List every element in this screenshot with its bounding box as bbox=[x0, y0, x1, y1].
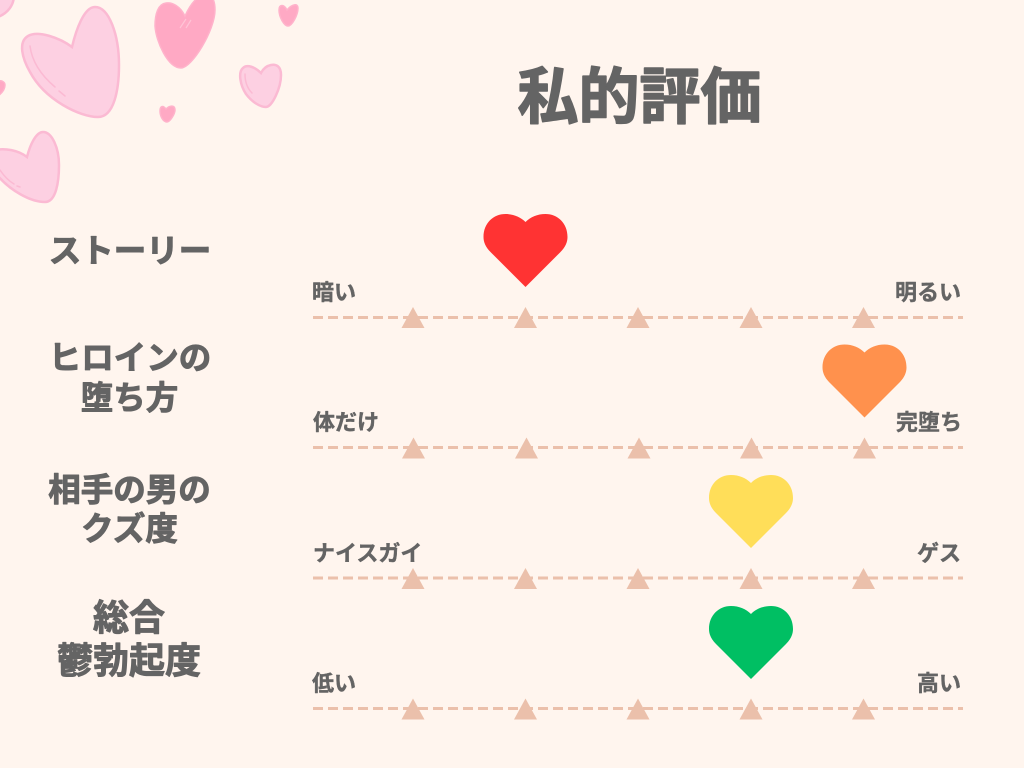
right scale label: 高い bbox=[917, 671, 961, 696]
left scale label: ナイスガイ bbox=[313, 541, 422, 566]
scale bbox=[313, 568, 963, 589]
right scale label: 完堕ち bbox=[896, 410, 962, 435]
label: 相手の男の bbox=[48, 472, 211, 508]
row: ストーリー bbox=[49, 214, 963, 328]
right scale label: 明るい bbox=[895, 280, 961, 305]
row: 総合鬱勃起度 bbox=[57, 597, 963, 720]
icon: red heart marker bbox=[484, 214, 568, 287]
scale bbox=[313, 438, 963, 458]
icon: edge fragment heart bbox=[0, 81, 5, 96]
label: 鬱勃起度 bbox=[57, 640, 201, 681]
label: クズ度 bbox=[81, 510, 178, 547]
icon: deep pink heart bbox=[155, 0, 215, 68]
scale bbox=[313, 307, 963, 328]
right scale label: ゲス bbox=[917, 541, 961, 566]
label: 総合 bbox=[93, 597, 165, 638]
label: ストーリー bbox=[49, 233, 211, 269]
left scale label: 暗い bbox=[312, 280, 356, 305]
icon: medium pink heart bbox=[240, 65, 281, 107]
decorative pink hearts bbox=[0, 0, 298, 202]
icon: corner fragment heart bbox=[0, 0, 14, 17]
row: ヒロインの堕ち方 bbox=[49, 340, 963, 458]
left scale label: 体だけ bbox=[313, 410, 379, 435]
label: ヒロインの bbox=[49, 340, 211, 376]
icon: orange heart marker bbox=[822, 344, 906, 418]
icon: yellow heart marker bbox=[709, 475, 793, 548]
left scale label: 低い bbox=[312, 671, 356, 696]
row: 相手の男のクズ度 bbox=[48, 472, 963, 589]
icon: small corner heart bbox=[279, 5, 298, 26]
icon: lower left pink heart bbox=[0, 132, 59, 202]
scale bbox=[313, 698, 963, 720]
icon: green heart marker bbox=[709, 606, 793, 679]
title: 私的評価 bbox=[517, 63, 762, 131]
icon: large pink heart bbox=[22, 7, 119, 117]
label: 堕ち方 bbox=[81, 380, 178, 416]
icon: tiny pink heart bbox=[160, 106, 175, 122]
